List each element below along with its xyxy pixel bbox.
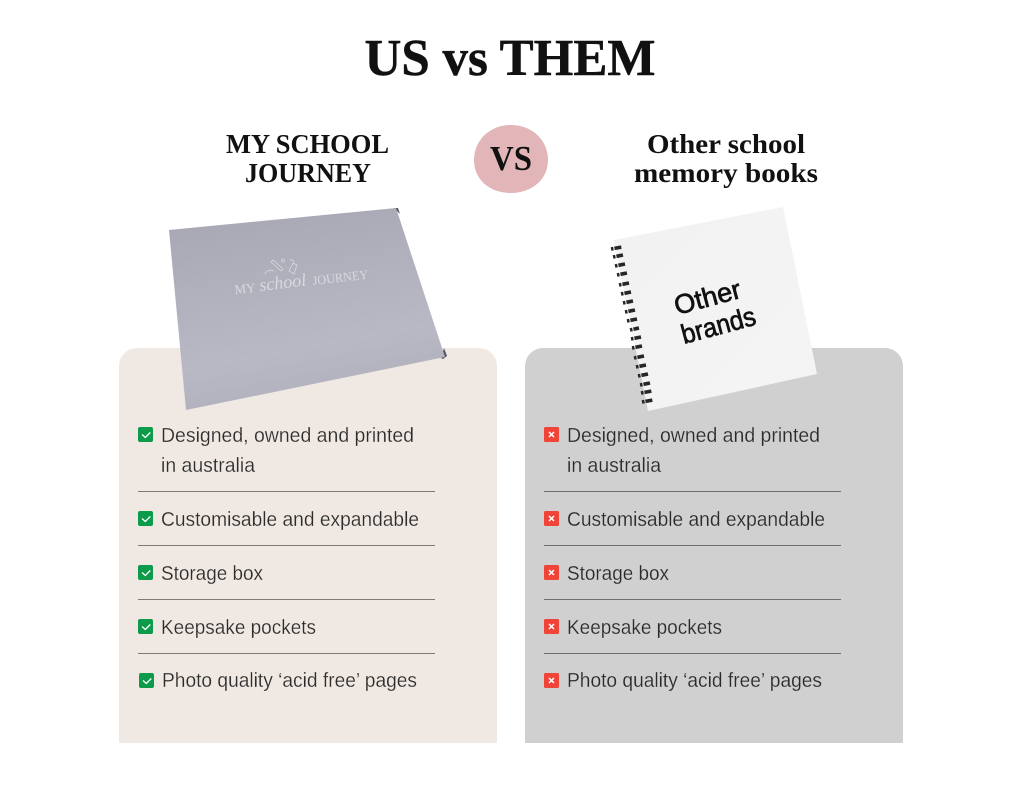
heading: my school journey: MY SCHOOL — [226, 128, 389, 159]
heading: other school memory books: Other school — [647, 128, 805, 159]
row: customisable: Customisable and expandable — [567, 509, 825, 531]
image: other brands spiral book — [611, 207, 817, 411]
row: designed — [138, 425, 414, 477]
book cover text: Other — [671, 274, 744, 321]
row: designed: Designed, owned and printed — [567, 425, 820, 447]
book cover logo: JOURNEY — [312, 267, 370, 288]
title: US vs THEM — [364, 30, 656, 87]
row: keepsake pockets: Keepsake pockets — [161, 617, 316, 639]
heading: my school journey — [226, 128, 389, 188]
image: my school journey book — [169, 208, 447, 410]
list: my school journey features — [138, 425, 435, 692]
heading: other school memory books: memory books — [634, 157, 818, 188]
row: designed: Designed, owned and printed — [161, 425, 414, 447]
row: photo quality: Photo quality ‘acid free’ pages — [567, 670, 822, 692]
book cover logo: MY — [234, 280, 257, 297]
vs badge: VS — [490, 139, 532, 178]
row: customisable: Customisable and expandable — [161, 509, 419, 531]
row: designed — [544, 425, 820, 477]
book cover text: brands — [678, 301, 759, 350]
list: other brands features — [544, 425, 841, 692]
heading: my school journey: JOURNEY — [245, 157, 371, 188]
row: designed: in australia — [161, 455, 256, 477]
spiral binding — [611, 247, 653, 402]
row: designed: in australia — [567, 455, 662, 477]
row: keepsake pockets: Keepsake pockets — [567, 617, 722, 639]
book cover text — [671, 274, 759, 350]
row: photo quality: Photo quality ‘acid free’ pages — [162, 670, 417, 692]
panel: my school journey — [119, 348, 497, 743]
panel: other brands — [525, 348, 903, 743]
row: storage box: Storage box — [161, 563, 263, 585]
row: storage box: Storage box — [567, 563, 669, 585]
vs badge — [474, 125, 548, 193]
book cover logo — [234, 259, 370, 297]
book cover logo: school — [258, 270, 307, 295]
heading: other school memory books — [634, 128, 818, 188]
